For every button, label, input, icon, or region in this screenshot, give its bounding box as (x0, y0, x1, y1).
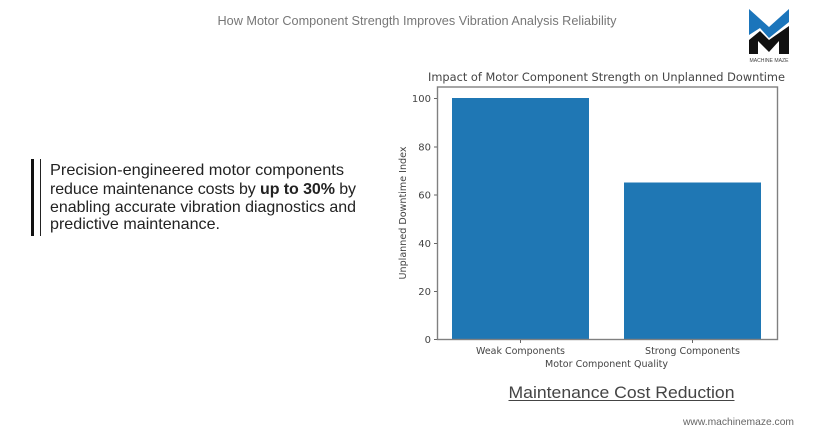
axes frame (438, 87, 778, 340)
callout: key statement: enabling accurate vibration diagnostics and (50, 199, 356, 216)
y axis ticks and labels: 40 (418, 239, 431, 250)
y axis ticks and labels: 60 (418, 190, 431, 202)
y axis label: Unplanned Downtime Index (398, 146, 409, 280)
callout: key statement: predictive maintenance. (50, 216, 220, 233)
bar: weak components (452, 98, 589, 340)
y axis ticks and labels: 0 (425, 335, 431, 346)
bar: strong components (624, 182, 761, 340)
x axis category labels (476, 346, 740, 357)
chart caption: Maintenance Cost Reduction (508, 383, 734, 402)
x axis category labels: Strong Components (645, 346, 740, 357)
callout: key statement (31, 159, 356, 236)
bar chart (398, 70, 785, 370)
title: How Motor Component Strength Improves Vibration Analysis Reliability (218, 13, 617, 28)
y axis ticks and labels (412, 94, 692, 346)
y axis ticks and labels: 20 (418, 287, 431, 298)
website url: www.machinemaze.com (682, 416, 794, 428)
chart title: Impact of Motor Component Strength on Unplanned Downtime (428, 70, 785, 84)
callout: key statement: reduce maintenance costs by up to 30% by (50, 181, 356, 198)
icon: Machine Maze logo (749, 9, 789, 64)
x axis label: Motor Component Quality (545, 359, 668, 370)
y axis ticks and labels: 80 (418, 142, 431, 154)
icon: Machine Maze logo: MACHINE MAZE (750, 58, 789, 64)
callout: key statement: Precision-engineered motor components (50, 162, 344, 179)
y axis ticks and labels: 100 (412, 94, 431, 105)
x axis category labels: Weak Components (476, 346, 565, 357)
